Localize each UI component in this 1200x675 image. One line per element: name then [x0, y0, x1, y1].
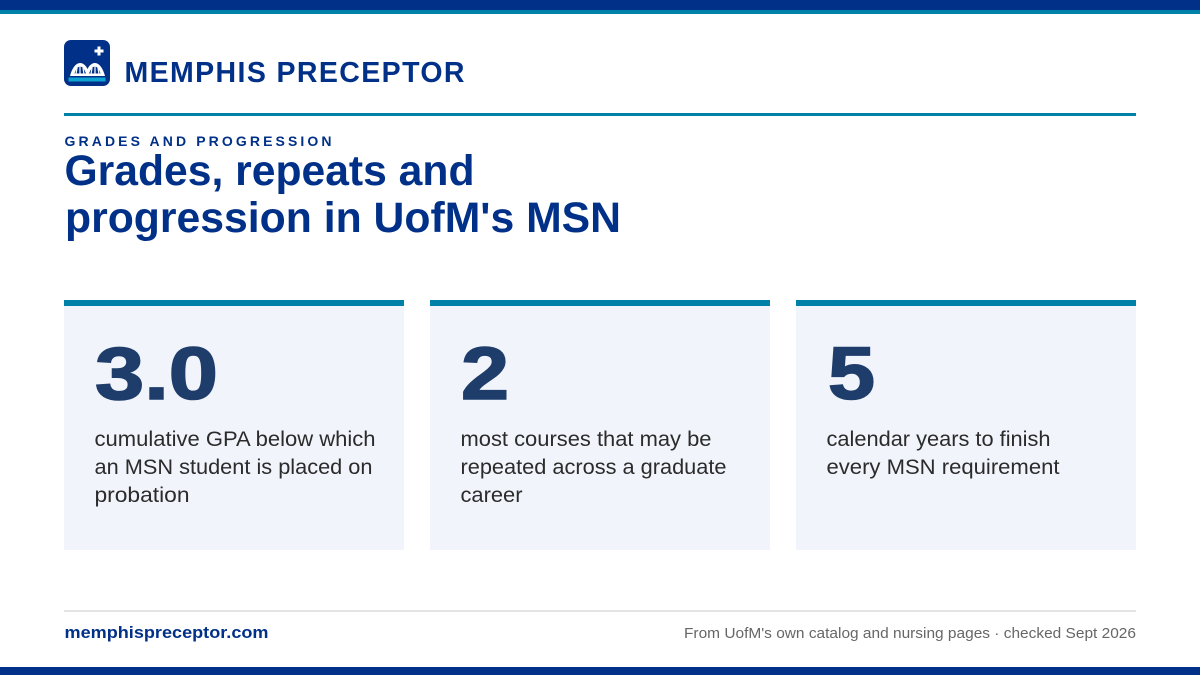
title: progression in UofM's MSN — [65, 194, 621, 242]
stat number: 5: 5 — [828, 332, 875, 415]
brand name: MEMPHIS PRECEPTOR — [124, 57, 464, 89]
title: Grades, repeats and — [64, 147, 474, 195]
stat description: repeats: career — [460, 483, 522, 507]
stat description: GPA: probation — [94, 483, 190, 507]
stat number: 3.0: 3.0 — [95, 332, 218, 415]
stat description: repeats: repeated across a graduate — [460, 455, 726, 479]
footer site name: memphispreceptor.com — [64, 623, 268, 642]
title — [64, 147, 621, 242]
stat description: time limit: every MSN requirement — [826, 455, 1060, 479]
stat description: GPA: cumulative GPA below which — [94, 427, 376, 451]
panel: repeats stat — [430, 300, 770, 550]
panel: GPA stat — [64, 300, 404, 550]
eyebrow: GRADES AND PROGRESSION — [64, 133, 332, 149]
header rule — [64, 113, 1136, 116]
stat description: GPA — [94, 427, 376, 507]
top bar — [0, 0, 1200, 14]
stat description: repeats — [460, 427, 726, 507]
stat description: repeats: most courses that may be — [460, 427, 712, 451]
icon: bridge logo — [64, 40, 110, 86]
stat description: GPA: an MSN student is placed on — [94, 455, 372, 479]
stat description: time limit — [826, 427, 1060, 479]
bottom bar — [0, 667, 1200, 675]
footer source note: From UofM's own catalog and nursing pages · checked Sept 2026 — [684, 625, 1136, 642]
footer rule — [64, 610, 1136, 612]
panel: time limit stat — [796, 300, 1136, 550]
stat number: 2: 2 — [461, 332, 509, 415]
stat description: time limit: calendar years to finish — [826, 427, 1050, 451]
